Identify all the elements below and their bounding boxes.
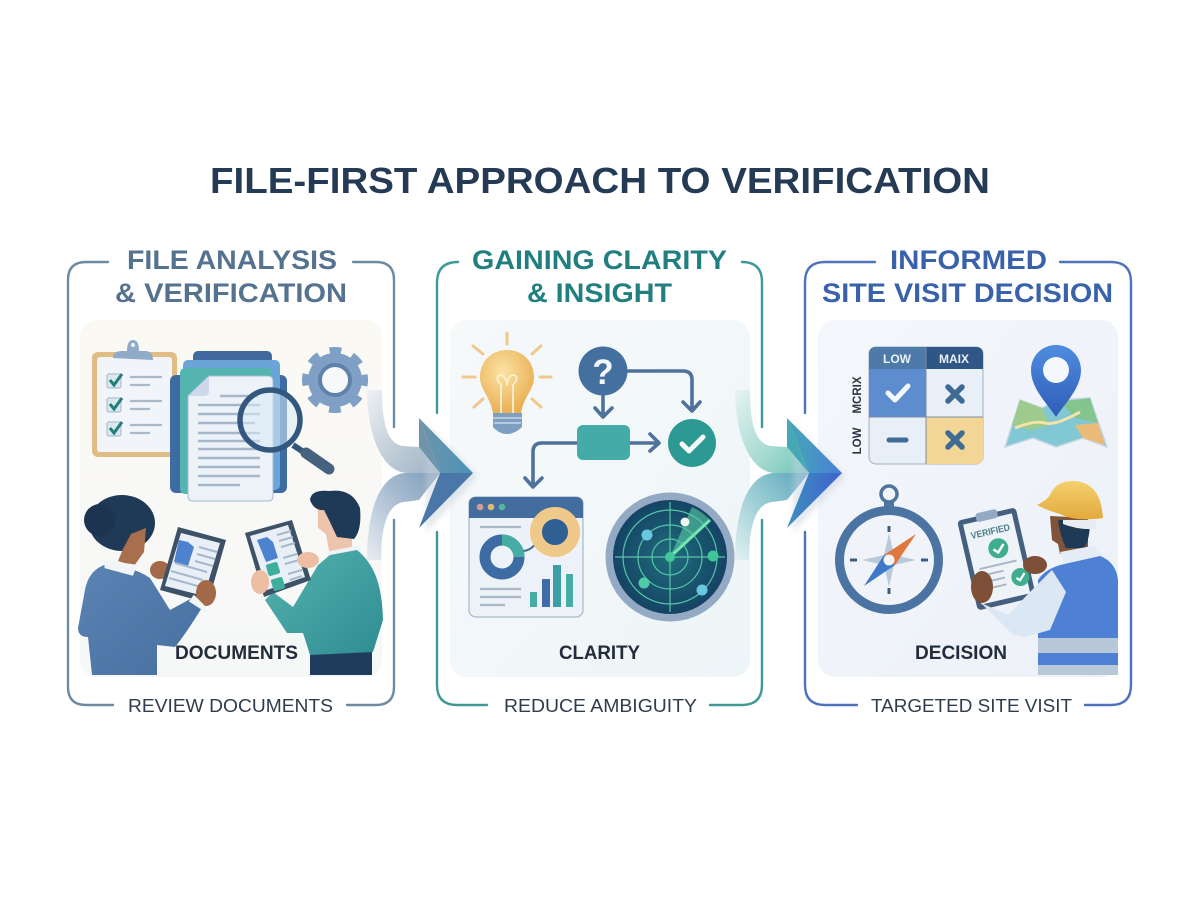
panel heading: GAINING CLARITY <box>472 245 727 275</box>
decision matrix <box>852 347 983 464</box>
figure: woman with tablet <box>78 495 226 675</box>
panel card <box>818 320 1118 677</box>
decision matrix: MCRIX <box>852 376 864 414</box>
flow connectors <box>525 371 700 487</box>
panel frame <box>437 262 762 705</box>
decision matrix: MAIX <box>939 352 969 366</box>
icon: gear <box>306 350 364 410</box>
flowchart: ? <box>592 353 614 392</box>
panel card <box>450 320 750 677</box>
check node <box>668 419 716 467</box>
caption: targeted site visit: TARGETED SITE VISIT <box>871 696 1072 716</box>
decision matrix: LOW <box>883 352 912 366</box>
label: documents: DOCUMENTS <box>175 642 298 664</box>
caption: review documents: REVIEW DOCUMENTS <box>128 696 333 716</box>
panel heading: INFORMED <box>890 245 1047 275</box>
decision matrix: LOW <box>852 427 864 454</box>
process node <box>577 425 630 460</box>
caption: reduce ambiguity: REDUCE AMBIGUITY <box>504 696 697 716</box>
flowchart <box>525 346 716 487</box>
icon: light bulb <box>463 333 551 434</box>
icon: compass <box>835 486 943 614</box>
panel frame <box>805 262 1131 705</box>
arrow: clarity to decision <box>735 390 846 560</box>
panel: informed site visit decision <box>805 245 1131 716</box>
panel frame <box>68 262 394 705</box>
worker body <box>1050 516 1088 554</box>
panel heading: SITE VISIT DECISION <box>822 278 1113 308</box>
icon: radar <box>606 492 734 622</box>
panel: file analysis and verification <box>68 245 394 716</box>
label: clarity: CLARITY <box>559 642 640 664</box>
arrow: documents to clarity <box>367 390 478 560</box>
panel heading: & VERIFICATION <box>115 278 347 308</box>
panel heading <box>115 245 347 308</box>
label: decision: DECISION <box>915 642 1007 664</box>
icon: document stack with magnifier <box>170 351 329 501</box>
icon: clipboard checklist <box>92 340 177 457</box>
panel heading: FILE ANALYSIS <box>127 245 337 275</box>
figure: site worker with clipboard <box>956 481 1118 675</box>
panel: gaining clarity and insight <box>437 245 762 716</box>
panel heading <box>822 245 1113 308</box>
clipboard <box>956 504 1036 610</box>
panel card <box>80 320 382 677</box>
clipboard: VERIFIED <box>970 522 1011 542</box>
hard hat <box>1037 481 1103 519</box>
panel heading <box>472 245 727 308</box>
panel heading: & INSIGHT <box>527 278 673 308</box>
icon: dashboard <box>469 497 583 617</box>
icon: map with location pin <box>1005 345 1107 447</box>
question node <box>578 346 628 396</box>
title: FILE-FIRST APPROACH TO VERIFICATION <box>210 160 990 201</box>
figure: man with tablet <box>245 491 383 675</box>
